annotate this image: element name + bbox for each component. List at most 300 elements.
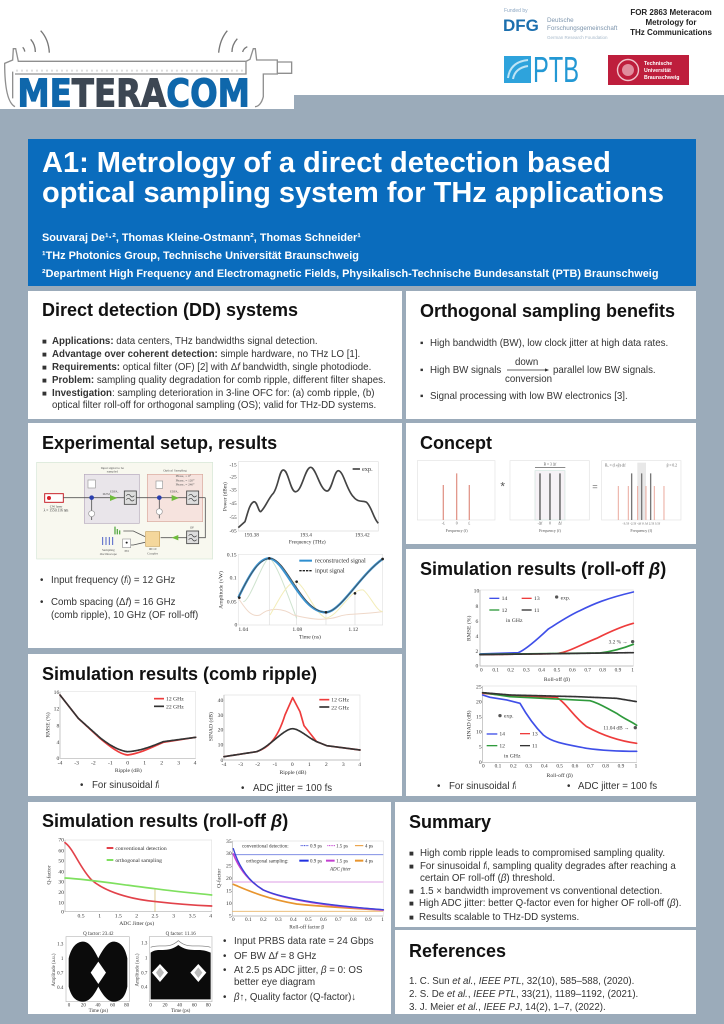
- consortium label: [630, 8, 712, 37]
- logo: DFG funding: Forschungsgemeinschaft: [547, 25, 618, 32]
- text block: DD bullets: optical filter roll-off for orthogonal sampling (OS); valid for THz-DD systems.: [52, 400, 376, 411]
- chart: RMSE vs roll-off: [466, 588, 634, 683]
- chart: eye diagram Q 23.42: 1.3: [57, 943, 64, 948]
- chart: SINAD vs ripple: 2: [325, 762, 328, 768]
- diagram: experimental setup: OF: [190, 525, 194, 529]
- chart: reconstructed signal: Time (ns): [299, 633, 321, 640]
- chart: Q-factor vs ADC jitter: [46, 838, 212, 927]
- chart: eye diagram Q 11.16: Q factor: 11.16: [166, 932, 196, 937]
- chart: SINAD vs roll-off: 20: [476, 699, 482, 705]
- logo: DFG funding: Deutsche: [547, 17, 574, 24]
- chart: Q-factor vs roll-off factor: 5: [229, 913, 232, 919]
- heading: Concept: [420, 433, 492, 453]
- chart: eye diagram Q 23.42: Q factor: 23.42: [83, 932, 114, 937]
- logo: TU Braunschweig: Universität: [644, 68, 671, 74]
- diagram: convolution concept: *: [500, 480, 505, 494]
- diagram: experimental setup: 90/10: [149, 547, 157, 551]
- text block: summary bullets: High ADC jitter: better Q-factor even for higher OF roll-off (β).: [419, 898, 681, 909]
- chart: Q-factor vs roll-off factor: 0.3: [275, 917, 282, 923]
- heading: Experimental setup, results: [42, 433, 277, 453]
- authors and affiliations: Souvaraj De¹·², Thomas Kleine-Ostmann², Thomas Schneider¹: [42, 232, 361, 244]
- chart: RMSE vs roll-off: 0.5: [554, 668, 561, 674]
- chart: Q-factor vs roll-off factor: 0.9 ps: [310, 845, 322, 850]
- chart: Q-factor vs roll-off factor: 4 ps: [365, 860, 373, 865]
- chart: Q-factor vs ADC jitter: 30: [58, 880, 64, 886]
- chart: reconstructed signal: 0.05: [227, 599, 237, 605]
- diagram: convolution concept: 0: [456, 522, 458, 526]
- chart: Q-factor vs ADC jitter: orthogonal sampling: [115, 858, 162, 864]
- chart: SINAD vs roll-off: 0.6: [572, 764, 579, 770]
- chart: eye diagram Q 23.42: 1: [61, 957, 64, 962]
- logo: DFG funding: Funded by: [504, 8, 528, 14]
- text block: PRBS parameters: At 2.5 ps ADC jitter, β = 0: OS: [234, 965, 363, 976]
- chart: exp power spectrum: -35: [230, 488, 237, 494]
- text block: DD bullets: Investigation: sampling deterioration in 3-line OFC for: (a) comb ripple, (b): [52, 388, 374, 399]
- chart: eye diagram Q 11.16: 40: [177, 1004, 183, 1009]
- diagram: experimental setup: sampled: [107, 470, 118, 474]
- authors and affiliations: ¹THz Photonics Group, Technische Universität Braunschweig: [42, 250, 359, 262]
- text block: summary bullets: Results scalable to THz-DD systems.: [419, 912, 579, 923]
- chart: Q-factor vs roll-off factor: 25: [226, 864, 232, 870]
- chart: Q-factor vs ADC jitter: 2: [135, 913, 138, 919]
- diagram: convolution concept: fᵢ: [468, 522, 471, 526]
- chart: Q-factor vs roll-off factor: conventional detection:: [242, 845, 289, 850]
- text block: benefits: High BW signals: [430, 365, 501, 376]
- chart: RMSE vs ripple: 12 GHz: [166, 697, 184, 703]
- diagram: convolution concept: Frequency (f): [446, 528, 468, 533]
- diagram: experimental setup: Phase₁ = 0°: [176, 474, 192, 478]
- panel: simulation results roll-off left: [28, 802, 391, 1014]
- text block: benefits: down: [515, 357, 538, 368]
- text block: PRBS parameters: β↑, Quality factor (Q-factor)↓: [233, 992, 356, 1003]
- chart: eye diagram Q 11.16: 60: [192, 1004, 197, 1009]
- chart: eye diagram Q 11.16: 0.7: [141, 971, 148, 976]
- chart: eye diagram Q 11.16: Time (ps): [171, 1009, 191, 1014]
- diagram: experimental setup: MZM₁: [103, 492, 111, 496]
- heading: Simulation results (roll-off β): [42, 811, 288, 831]
- chart: Q-factor vs roll-off factor: orthogonal sampling:: [246, 859, 288, 864]
- title: A1: Metrology of a direct detection based: [42, 147, 611, 179]
- chart: exp power spectrum: -65: [230, 528, 237, 534]
- chart: SINAD vs roll-off: 15: [476, 715, 482, 721]
- chart: RMSE vs ripple: -2: [91, 760, 96, 766]
- text block: setup parameters: Comb spacing (Δf) = 16 GHz: [51, 597, 176, 608]
- chart: Q-factor vs ADC jitter: 40: [58, 869, 64, 875]
- text block: summary bullets: 1.5 × bandwidth improvement vs conventional detection.: [420, 886, 662, 897]
- chart: Q-factor vs ADC jitter: Q-factor: [46, 865, 53, 885]
- chart: SINAD vs roll-off: 0.2: [510, 764, 517, 770]
- panel: simulation results roll-off right: [406, 549, 696, 796]
- text block: benefits: [420, 338, 668, 402]
- chart: eye diagram Q 11.16: Amplitude (a.u.): [135, 953, 140, 987]
- chart: SINAD vs ripple: -4: [222, 762, 227, 768]
- text block: reference list: 1. C. Sun et al., IEEE PTL, 32(10), 585–588, (2020).: [409, 976, 634, 987]
- text block: DD bullets: [42, 336, 386, 411]
- chart: SINAD vs ripple: Ripple (dB): [280, 769, 307, 776]
- chart: SINAD vs roll-off: 0: [479, 760, 482, 766]
- chart: SINAD vs ripple: 40: [218, 698, 223, 704]
- chart: SINAD vs ripple: -3: [238, 762, 243, 768]
- chart: SINAD vs roll-off: 13: [532, 732, 538, 738]
- logo: TU Braunschweig: Technische: [644, 61, 672, 67]
- chart: Q-factor vs roll-off factor: 35: [226, 839, 232, 845]
- chart: Q-factor vs ADC jitter: 1: [98, 913, 101, 919]
- chart: exp power spectrum: [222, 462, 378, 545]
- chart: eye diagram Q 23.42: 0: [68, 1004, 71, 1009]
- chart: SINAD vs roll-off: 5: [479, 745, 482, 751]
- chart: exp power spectrum: -25: [230, 475, 237, 481]
- chart: SINAD vs roll-off: SINAD (dB): [466, 710, 473, 740]
- chart: eye diagram Q 23.42: 80: [124, 1004, 130, 1009]
- chart: eye diagram Q 11.16: 0.4: [141, 986, 148, 991]
- chart: RMSE vs roll-off: in GHz: [506, 618, 523, 624]
- text block: DD bullets: ■: [42, 363, 47, 372]
- chart: SINAD vs roll-off: 0.5: [556, 764, 563, 770]
- text block: benefits: ▪: [420, 391, 423, 402]
- text block: roll-off conditions: ADC jitter = 100 fs: [578, 781, 657, 792]
- chart: RMSE vs ripple: 8: [57, 723, 60, 729]
- chart: RMSE vs roll-off: 13: [534, 596, 540, 602]
- chart: eye diagram Q 23.42: 0.4: [57, 986, 64, 991]
- text block: summary bullets: ■: [409, 913, 414, 922]
- panel: references: [395, 930, 696, 1014]
- chart: reconstructed signal: 1.12: [348, 627, 358, 633]
- diagram: experimental setup: Sampling: [102, 548, 115, 552]
- chart: Q-factor vs ADC jitter: ADC Jitter (ps): [119, 920, 154, 927]
- chart: Q-factor vs roll-off factor: [216, 839, 384, 930]
- chart: SINAD vs ripple: 20: [218, 728, 223, 734]
- chart: RMSE vs ripple: 12: [54, 707, 60, 713]
- chart: Q-factor vs roll-off factor: 0.1: [245, 917, 252, 923]
- chart: SINAD vs roll-off: 0.8: [602, 764, 609, 770]
- diagram: convolution concept: =: [592, 481, 598, 491]
- text block: DD bullets: Requirements: optical filter (OF) [2] with Δf bandwidth, single photodiode.: [52, 362, 371, 373]
- chart: SINAD vs roll-off: 0.3: [525, 764, 532, 770]
- text block: summary bullets: For sinusoidal fi, sampling quality degrades after reaching a: [420, 861, 676, 872]
- heading: Simulation results (roll-off β): [420, 559, 666, 579]
- text block: benefits: ▪: [420, 365, 423, 376]
- chart: Q-factor vs roll-off factor: Roll-off factor β: [289, 923, 324, 930]
- chart: eye diagram Q 11.16: [135, 932, 212, 1014]
- chart: RMSE vs ripple: [44, 690, 197, 774]
- diagram: convolution concept: -3.5f -2.5f -Δf 0 Δf 2.5f 3.5f: [623, 522, 661, 526]
- text block: setup parameters: (comb ripple), 10 GHz (OF roll-off): [51, 610, 198, 621]
- chart: RMSE vs roll-off: 4: [475, 634, 478, 640]
- chart: Q-factor vs ADC jitter: 10: [58, 900, 64, 906]
- chart: Q-factor vs roll-off factor: 4 ps: [365, 845, 373, 850]
- panel: summary: [395, 802, 696, 927]
- chart: reconstructed signal: [218, 553, 384, 640]
- chart: Q-factor vs ADC jitter: 2.5: [151, 913, 159, 919]
- text block: benefits: High bandwidth (BW), low clock jitter at high data rates.: [430, 338, 668, 349]
- chart: RMSE vs ripple: 4: [57, 740, 60, 746]
- chart: SINAD vs roll-off: Roll-off (β): [547, 772, 573, 779]
- chart: RMSE vs roll-off: 12: [502, 608, 507, 614]
- chart: eye diagram Q 11.16: 1.3: [141, 942, 148, 947]
- panel: simulation results comb ripple: [28, 654, 402, 796]
- chart: SINAD vs roll-off: 0.9: [618, 764, 625, 770]
- chart: RMSE vs ripple: -3: [74, 760, 79, 766]
- text block: PRBS parameters: •: [223, 992, 227, 1003]
- logo: TU Braunschweig: [608, 55, 689, 85]
- title banner: [28, 139, 696, 286]
- logo: METERACOM caliper: [5, 31, 292, 116]
- chart: SINAD vs ripple: -2: [255, 762, 260, 768]
- diagram: experimental setup: Input signal to be: [101, 466, 124, 470]
- chart: Q-factor vs roll-off factor: 1.5 ps: [336, 860, 348, 865]
- chart: exp power spectrum: -45: [230, 501, 237, 507]
- chart: SINAD vs roll-off: 11.04 dB →: [603, 726, 629, 732]
- diagram: experimental setup: λ = 1550.116 nm: [44, 509, 69, 513]
- diagram: convolution concept: Frequency (f): [630, 528, 653, 533]
- chart: Q-factor vs roll-off factor: 0.5: [305, 917, 312, 923]
- diagram: convolution concept: 0: [549, 522, 551, 526]
- chart: RMSE vs roll-off: 0: [475, 663, 478, 669]
- text block: summary bullets: High comb ripple leads to compromised sampling quality.: [420, 848, 665, 859]
- diagram: experimental setup: [37, 462, 213, 559]
- chart: RMSE vs ripple: 2: [160, 760, 163, 766]
- text block: setup parameters: •: [40, 575, 44, 586]
- chart: RMSE vs ripple: 22 GHz: [166, 705, 184, 711]
- diagram: convolution concept: -Δf: [538, 522, 543, 526]
- text block: benefits: Signal processing with low BW electronics [3].: [430, 391, 628, 402]
- text block: DD bullets: ■: [42, 337, 47, 346]
- chart: SINAD vs roll-off: 11: [532, 744, 538, 750]
- text block: PRBS parameters: •: [223, 951, 227, 962]
- chart: reconstructed signal: 0.15: [227, 553, 237, 559]
- chart: reconstructed signal: input signal: [315, 568, 345, 575]
- text block: roll-off conditions: •: [567, 781, 571, 792]
- chart: SINAD vs ripple: 30: [218, 713, 223, 719]
- chart: SINAD vs roll-off: 0: [482, 764, 485, 770]
- panel: experimental setup, results: [28, 423, 402, 648]
- chart: SINAD vs roll-off: exp.: [504, 714, 514, 720]
- diagram: experimental setup: CW laser: [50, 505, 63, 509]
- text block: roll-off conditions: [437, 781, 657, 792]
- chart: RMSE vs roll-off: 0.9: [615, 668, 622, 674]
- chart: exp power spectrum: 193.38: [244, 532, 259, 538]
- chart: exp power spectrum: -15: [230, 462, 237, 468]
- chart: Q-factor vs ADC jitter: 4: [209, 913, 212, 919]
- chart: eye diagram Q 23.42: 20: [81, 1004, 86, 1009]
- chart: eye diagram Q 23.42: Time (ps): [89, 1009, 108, 1014]
- text block: reference list: 2. S. De et al., IEEE PTL, 33(21), 1189–1192, (2021).: [409, 989, 638, 1000]
- chart: RMSE vs ripple: 16: [54, 690, 60, 696]
- heading: Orthogonal sampling benefits: [420, 301, 675, 321]
- text block: ripple conditions: ADC jitter = 100 fs: [253, 783, 332, 794]
- chart: exp power spectrum: exp.: [362, 466, 373, 473]
- chart: RMSE vs roll-off: Roll-off (β): [544, 676, 570, 683]
- chart: eye diagram Q 11.16: 0: [149, 1004, 152, 1009]
- text block: summary bullets: ■: [409, 849, 414, 858]
- chart: exp power spectrum: 193.4: [300, 532, 312, 538]
- chart: Q-factor vs roll-off factor: 1.5 ps: [336, 845, 348, 850]
- diagram: convolution concept: [417, 461, 681, 533]
- heading: Direct detection (DD) systems: [42, 300, 298, 320]
- chart: Q-factor vs roll-off factor: 0.8: [350, 917, 357, 923]
- chart: SINAD vs roll-off: 12: [499, 744, 505, 750]
- text block: summary bullets: certain OF roll-off (β) threshold.: [420, 873, 555, 884]
- logo: DFG funding: DFG: [503, 16, 539, 35]
- chart: RMSE vs roll-off: 2: [475, 649, 478, 655]
- chart: SINAD vs roll-off: [466, 684, 638, 779]
- chart: RMSE vs roll-off: 10: [474, 588, 479, 594]
- chart: RMSE vs roll-off: 0.2: [507, 668, 514, 674]
- text block: PRBS parameters: •: [223, 936, 227, 947]
- logo: METERACOM caliper: METERACOM: [17, 72, 250, 116]
- chart: RMSE vs ripple: 4: [194, 760, 197, 766]
- chart: exp power spectrum: 193.42: [355, 532, 370, 538]
- text block: benefits: conversion: [505, 374, 552, 385]
- chart: RMSE vs roll-off: exp.: [561, 595, 571, 601]
- diagram: convolution concept: -fᵢ: [442, 522, 445, 526]
- chart: RMSE vs ripple: 0: [57, 756, 60, 762]
- chart: RMSE vs ripple: 0: [126, 760, 129, 766]
- chart: SINAD vs roll-off: 0.7: [587, 764, 594, 770]
- text block: roll-off conditions: For sinusoidal fi: [449, 781, 516, 792]
- text block: ripple conditions: •: [241, 783, 245, 794]
- chart: RMSE vs roll-off: RMSE (%): [466, 616, 473, 641]
- chart: reconstructed signal: 1.04: [238, 627, 248, 633]
- text block: setup parameters: Input frequency (fi) = 12 GHz: [51, 575, 175, 586]
- chart: eye diagram Q 11.16: 1: [145, 956, 148, 961]
- text block: roll-off conditions: •: [437, 781, 441, 792]
- panel: direct detection systems: [28, 291, 402, 419]
- consortium label: Metrology for: [645, 18, 697, 27]
- chart: RMSE vs roll-off: 1: [631, 668, 634, 674]
- chart: RMSE vs roll-off: 8: [475, 604, 478, 610]
- chart: RMSE vs roll-off: 0.3: [523, 668, 530, 674]
- text block: reference list: 3. J. Meier et al., IEEE PJ, 14(2), 1–7, (2022).: [409, 1002, 606, 1013]
- chart: Q-factor vs roll-off factor: 1: [381, 917, 384, 923]
- chart: eye diagram Q 11.16: 80: [206, 1004, 211, 1009]
- text block: PRBS parameters: OF BW Δf = 8 GHz: [234, 951, 317, 962]
- chart: eye diagram Q 23.42: Amplitude (a.u.): [52, 953, 57, 987]
- diagram: experimental setup: Oscilloscope: [100, 552, 117, 556]
- heading: Summary: [409, 812, 491, 832]
- chart: RMSE vs roll-off: 0.1: [492, 668, 499, 674]
- text block: ripple conditions: [80, 780, 332, 794]
- chart: reconstructed signal: 0: [234, 622, 237, 628]
- panel: orthogonal sampling benefits: [406, 291, 696, 419]
- logo: TU Braunschweig: Braunschweig: [644, 75, 679, 81]
- authors and affiliations: [42, 232, 658, 280]
- chart: Q-factor vs roll-off factor: 0.2: [260, 917, 267, 923]
- chart: Q-factor vs ADC jitter: conventional detection: [115, 846, 167, 852]
- chart: SINAD vs roll-off: 25: [476, 684, 482, 690]
- chart: SINAD vs roll-off: 1: [635, 764, 638, 770]
- chart: SINAD vs ripple: 3: [342, 762, 345, 768]
- text block: DD bullets: Applications: data centers, THz bandwidths signal detection.: [52, 336, 318, 347]
- chart: Q-factor vs roll-off factor: Q-factor: [216, 869, 223, 888]
- text block: PRBS parameters: Input PRBS data rate = 24 Gbps: [234, 936, 374, 947]
- chart: RMSE vs roll-off: 3.2 % →: [609, 640, 628, 646]
- text block: reference list: [409, 976, 638, 1013]
- chart: RMSE vs ripple: 3: [177, 760, 180, 766]
- chart: SINAD vs ripple: [208, 695, 361, 776]
- chart: Q-factor vs ADC jitter: 0.5: [77, 913, 85, 919]
- chart: RMSE vs roll-off: 0.7: [584, 668, 591, 674]
- text block: DD bullets: ■: [42, 389, 47, 398]
- chart: Q-factor vs roll-off factor: 0.9 ps: [310, 860, 322, 865]
- chart: Q-factor vs roll-off factor: 0.7: [335, 917, 342, 923]
- chart: Q-factor vs ADC jitter: 50: [58, 859, 64, 865]
- chart: Q-factor vs roll-off factor: 0: [232, 917, 235, 923]
- chart: SINAD vs ripple: 1: [308, 762, 311, 768]
- diagram: experimental setup: EDFA₂: [170, 489, 179, 493]
- chart: RMSE vs roll-off: 11: [534, 608, 540, 614]
- chart: reconstructed signal: Amplitude (√W): [218, 571, 225, 609]
- chart: Q-factor vs roll-off factor: 0.9: [365, 917, 372, 923]
- chart: eye diagram Q 23.42: 60: [110, 1004, 116, 1009]
- chart: SINAD vs ripple: SINAD (dB): [208, 712, 215, 741]
- diagram: convolution concept: Frequency (f): [539, 528, 562, 533]
- chart: RMSE vs roll-off: 6: [475, 619, 478, 625]
- heading: Simulation results (comb ripple): [42, 664, 317, 684]
- chart: reconstructed signal: 0.1: [230, 576, 237, 582]
- chart: SINAD vs roll-off: 0.4: [541, 764, 548, 770]
- text block: setup parameters: •: [40, 597, 44, 608]
- diagram: experimental setup: Coupler: [147, 551, 159, 555]
- text block: summary bullets: ■: [409, 899, 414, 908]
- chart: Q-factor vs roll-off factor: 15: [226, 889, 232, 895]
- text block: ripple conditions: •: [80, 780, 84, 791]
- logo: DFG funding: [503, 8, 618, 40]
- chart: eye diagram Q 11.16: 20: [162, 1004, 168, 1009]
- chart: Q-factor vs ADC jitter: 3: [172, 913, 175, 919]
- panel: concept: [406, 423, 696, 544]
- chart: RMSE vs ripple: -4: [58, 760, 63, 766]
- logo: PTB: PTB: [533, 49, 579, 90]
- chart: Q-factor vs roll-off factor: 20: [226, 876, 232, 882]
- diagram: convolution concept: B = 3 Δf: [544, 463, 557, 467]
- logo: DFG funding: German Research Foundation: [547, 35, 608, 40]
- diagram: experimental setup: Phase₃ = 240°: [176, 483, 195, 487]
- text block: PRBS parameters: better eye diagram: [234, 977, 315, 988]
- chart: RMSE vs roll-off: 0.6: [569, 668, 576, 674]
- chart: RMSE vs ripple: 1: [143, 760, 146, 766]
- chart: SINAD vs roll-off: in GHz: [504, 754, 521, 760]
- chart: Q-factor vs ADC jitter: 1.5: [115, 913, 122, 919]
- consortium label: FOR 2863 Meteracom: [630, 8, 712, 17]
- consortium label: THz Communications: [630, 28, 712, 37]
- chart: SINAD vs roll-off: 10: [476, 730, 482, 736]
- chart: RMSE vs ripple: Ripple (dB): [115, 767, 142, 774]
- title: [42, 147, 664, 209]
- chart: SINAD vs ripple: 10: [218, 742, 223, 748]
- text block: summary bullets: ■: [409, 887, 414, 896]
- diagram: convolution concept: β = 0.2: [667, 464, 677, 468]
- diagram: experimental setup: PD: [125, 549, 129, 553]
- diagram: experimental setup: Phase₂ = 120°: [176, 478, 195, 482]
- chart: SINAD vs ripple: 0: [220, 758, 223, 764]
- chart: RMSE vs roll-off: 14: [502, 596, 507, 602]
- text block: benefits: parallel low BW signals.: [553, 365, 656, 376]
- text block: summary bullets: [409, 848, 681, 923]
- text block: PRBS parameters: •: [223, 965, 227, 976]
- text block: ripple conditions: For sinusoidal fi: [92, 780, 159, 791]
- text block: DD bullets: ■: [42, 350, 47, 359]
- text block: DD bullets: ■: [42, 376, 47, 385]
- diagram: experimental setup: Optical Sampling: [163, 469, 187, 473]
- diagram: experimental setup: EDFA₁: [110, 489, 119, 493]
- diagram: convolution concept: Δf: [558, 522, 563, 526]
- chart: Q-factor vs roll-off factor: 30: [226, 851, 232, 857]
- chart: SINAD vs ripple: 4: [358, 762, 361, 768]
- chart: Q-factor vs roll-off factor: 0.6: [320, 917, 327, 923]
- chart: Q-factor vs roll-off factor: 0.4: [290, 917, 297, 923]
- chart: Q-factor vs ADC jitter: 0: [61, 910, 64, 916]
